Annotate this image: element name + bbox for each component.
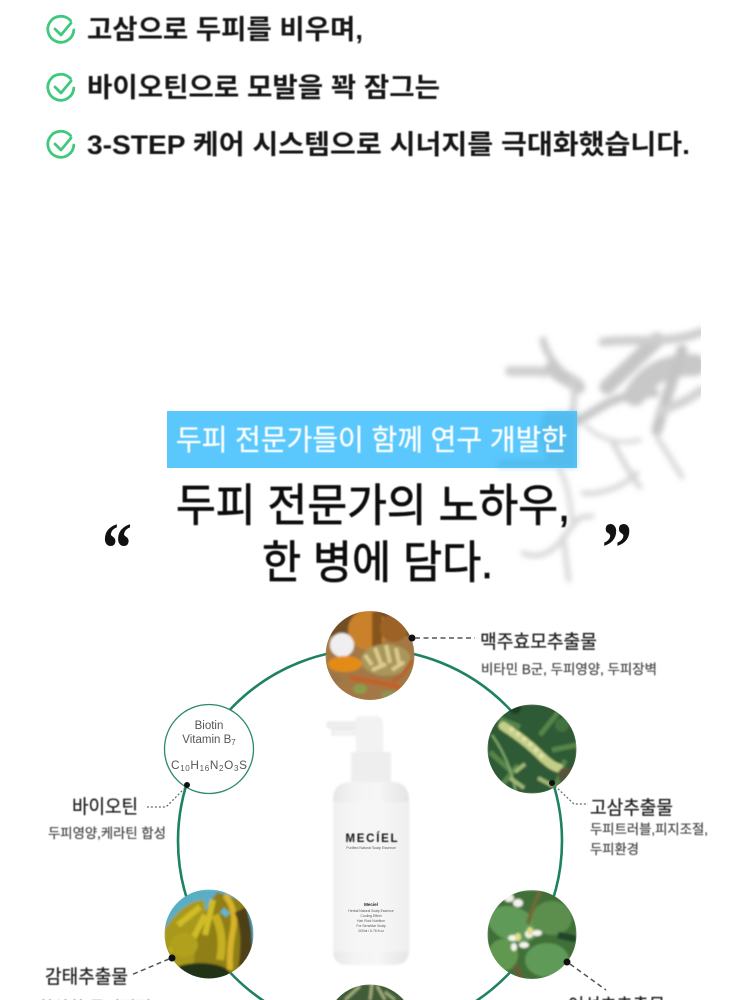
label: sophora extract: 고삼추출물 — [590, 797, 673, 819]
opening quote mark: “ — [102, 508, 132, 588]
product bottle: Herbal Natural Scalp Essence — [348, 909, 394, 913]
biotin formula circle: H — [190, 758, 199, 772]
leader line: ecklonia — [131, 954, 176, 975]
label: ecklonia extract: 감태추출물 — [45, 966, 128, 988]
biotin formula circle: Biotin — [195, 720, 223, 732]
label: brewer's yeast extract: 맥주효모추출물 — [480, 631, 597, 653]
leader line: houttuynia — [564, 958, 606, 990]
leader line: sophora — [549, 780, 588, 804]
biotin formula circle: 16 — [200, 764, 210, 773]
label: sophora extract — [590, 797, 708, 857]
biotin formula circle: O — [224, 758, 233, 772]
biotin formula circle: 7 — [231, 738, 236, 747]
biotin formula circle: C — [171, 758, 180, 772]
closing quote mark: ” — [602, 508, 632, 588]
check item 3: 3-STEP 케어 시스템으로 시너지를 극대화했습니다. — [87, 130, 690, 160]
check item 2: 바이오틴으로 모발을 꽉 잠그는 — [87, 73, 440, 103]
headline: 두피 전문가의 노하우, — [176, 480, 570, 531]
biotin formula circle — [164, 704, 254, 794]
label: sophora extract: 두피트러블,피지조절, — [590, 822, 708, 837]
checklist — [48, 15, 690, 160]
leader line: biotin — [147, 782, 190, 807]
label: biotin — [48, 796, 166, 841]
label: biotin: 바이오틴 — [72, 796, 138, 818]
product bottle: For Sensitive Scalp — [356, 924, 386, 928]
photo: bottom herb (cropped) — [336, 984, 404, 1000]
label: ecklonia extract — [38, 966, 156, 1000]
biotin formula circle: Vitamin B — [182, 734, 231, 746]
product bottle — [327, 716, 409, 965]
label: biotin: 두피영양,케라틴 합성 — [48, 826, 166, 841]
check item 1: 고삼으로 두피를 비우며, — [87, 15, 363, 45]
subtitle banner — [167, 408, 580, 471]
biotin formula circle: S — [239, 758, 247, 772]
biotin formula circle: 3 — [234, 764, 239, 773]
headline — [176, 480, 570, 588]
product bottle: MECÍEL — [346, 832, 398, 845]
photo: houttuynia leaves and flowers — [483, 890, 577, 983]
leaf shadow — [510, 332, 701, 580]
label: brewer's yeast extract: 비타민 B군, 두피영양, 두피장벽 — [481, 662, 657, 677]
headline: 한 병에 담다. — [262, 537, 493, 588]
biotin formula circle: 2 — [219, 764, 224, 773]
ingredient ring — [178, 649, 562, 1000]
label: brewer's yeast extract — [480, 631, 657, 677]
product bottle: Meciel — [364, 902, 378, 907]
product bottle: Cooling Effect — [360, 914, 382, 918]
biotin formula circle: 10 — [180, 764, 190, 773]
leader line: brewer's yeast — [408, 634, 475, 642]
product bottle: 200ml / 6.76 fl.oz — [358, 929, 384, 933]
product bottle: Purified Natural Scalp Essence — [346, 846, 396, 850]
photo: sophora flower — [487, 702, 577, 794]
label: sophora extract: 두피환경 — [590, 842, 639, 857]
subtitle banner: 두피 전문가들이 함께 연구 개발한 — [176, 424, 567, 457]
photo: ecklonia seaweed — [164, 890, 254, 978]
product bottle: Hair Root Nutrition — [357, 919, 385, 923]
photo: brewer's yeast ingredients — [325, 610, 415, 702]
biotin formula circle: N — [210, 758, 218, 772]
